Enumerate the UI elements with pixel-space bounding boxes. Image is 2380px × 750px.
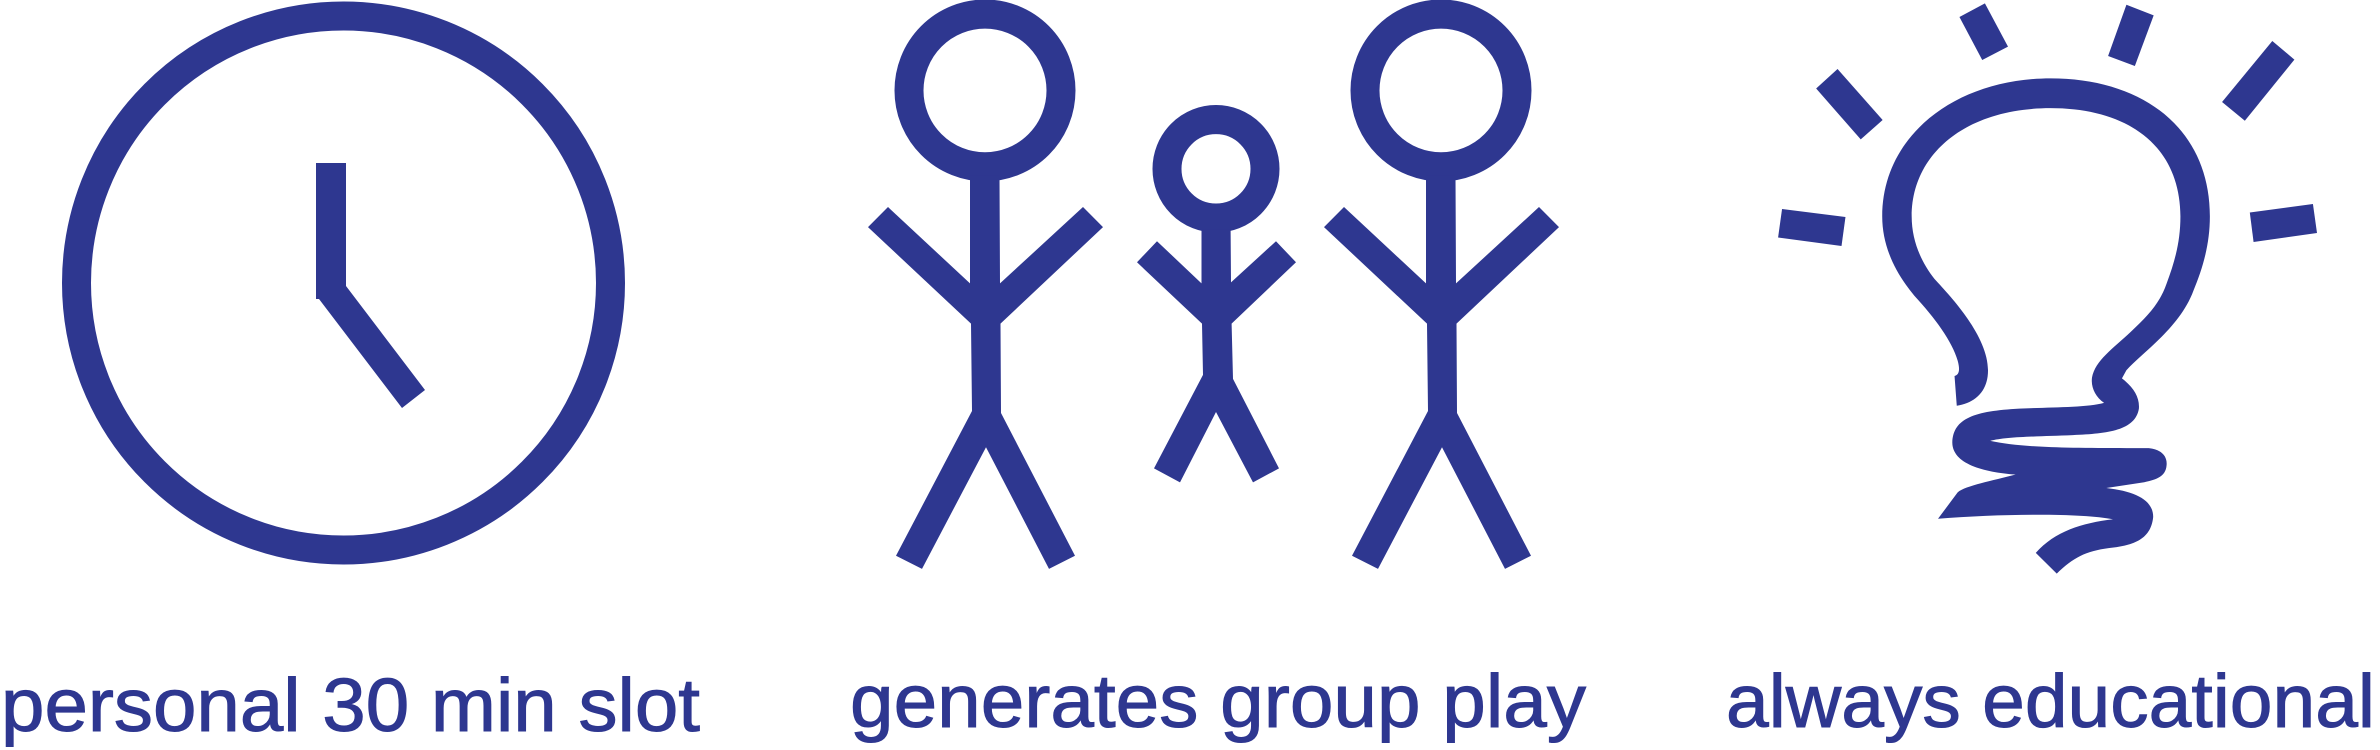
icon: light bulb with rays (1778, 3, 2317, 574)
panel: always educational (1726, 3, 2375, 743)
icon: rays (1778, 3, 2317, 246)
icon: bulb outline and screw base (1882, 78, 2210, 574)
icon: clock (76, 16, 610, 550)
label: generates group play: generates group play (850, 659, 1587, 743)
label: personal 30 min slot: personal 30 min slot (1, 663, 700, 747)
panel: personal 30 min slot (1, 16, 700, 747)
panel: generates group play (850, 14, 1587, 743)
icon: three stick figures (868, 14, 1559, 569)
icon: right adult figure (1324, 14, 1559, 569)
label: always educational: always educational (1726, 659, 2375, 743)
icon: child figure (1137, 120, 1296, 482)
icon: left adult figure (868, 14, 1103, 569)
